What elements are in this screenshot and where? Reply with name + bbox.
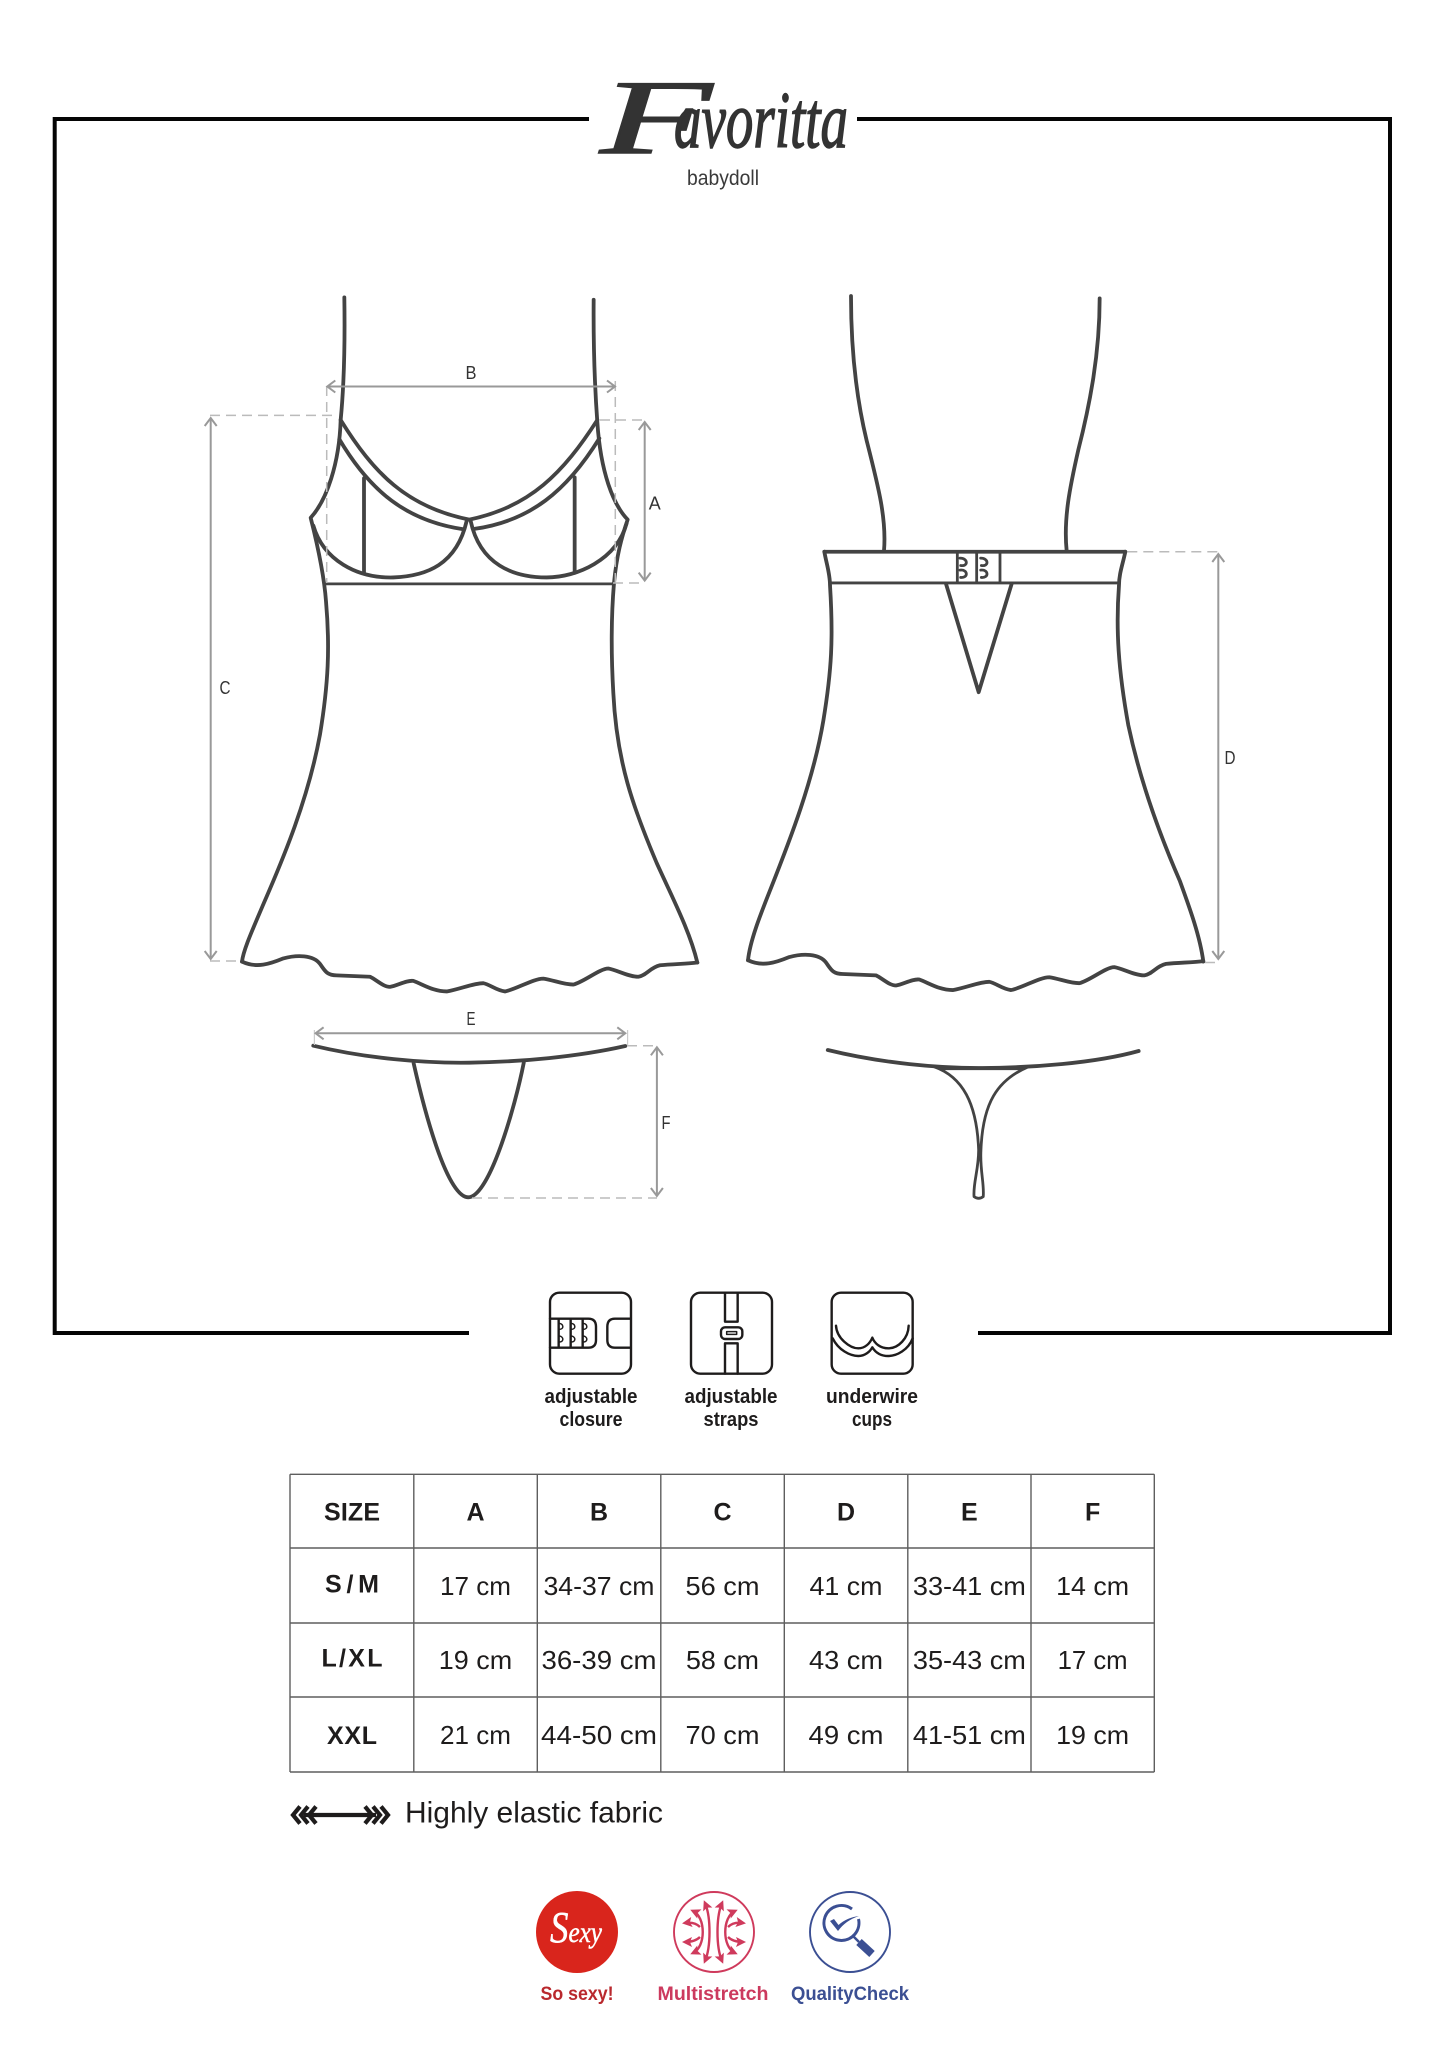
dimension C: C	[220, 678, 230, 698]
hook closure	[957, 553, 1000, 582]
table header row: E	[961, 1499, 978, 1527]
back side seams	[748, 552, 1203, 962]
row L/XL: L/XL	[322, 1645, 382, 1673]
cup underwires	[313, 521, 627, 577]
stretch circle	[674, 1892, 754, 1972]
title: Favoritta logo	[598, 59, 848, 176]
upper cup band	[341, 420, 597, 520]
back straps	[851, 296, 1100, 551]
dimension A: A	[649, 494, 661, 514]
back band	[824, 550, 1125, 554]
badge: Multistretch	[658, 1892, 768, 2005]
left strap and side seam	[242, 297, 345, 962]
back thong waistband	[828, 1050, 1139, 1068]
table header row: C	[713, 1499, 732, 1527]
label: adjustable closure: adjustable	[544, 1386, 638, 1408]
table header row: SIZE	[324, 1499, 380, 1527]
dimension F: F	[662, 1113, 670, 1133]
row S/M	[325, 1571, 1129, 1601]
front babydoll drawing	[242, 297, 697, 991]
row S/M: 17 cm	[440, 1571, 511, 1601]
dimension E: E	[466, 1009, 476, 1029]
back V insert	[946, 584, 1012, 692]
icon: magnifier with check	[824, 1905, 872, 1954]
row L/XL: 19 cm	[439, 1645, 512, 1675]
row XXL: 70 cm	[686, 1720, 760, 1750]
dimension A	[600, 420, 661, 583]
feature: underwire cups	[826, 1293, 918, 1431]
icon: double arrow	[293, 1806, 388, 1824]
table header row	[324, 1499, 1100, 1527]
So sexy label: So sexy!	[540, 1984, 614, 2005]
front thong waistband	[313, 1046, 625, 1063]
row XXL: XXL	[327, 1722, 377, 1750]
row XXL: 44-50 cm	[541, 1720, 657, 1750]
dimension E	[314, 1009, 628, 1045]
front thong panel	[414, 1063, 524, 1197]
dimension D	[1127, 552, 1236, 962]
title: Favoritta logo: F	[598, 59, 714, 176]
table header row: D	[837, 1499, 855, 1527]
row XXL: 21 cm	[440, 1720, 511, 1750]
row XXL: 41-51 cm	[913, 1720, 1026, 1750]
icon: closure	[550, 1293, 631, 1374]
row S/M: S/M	[325, 1571, 379, 1599]
cup bones	[364, 477, 575, 574]
right strap and side seam	[594, 300, 697, 963]
row XXL: 49 cm	[808, 1720, 884, 1750]
front hem	[242, 956, 697, 991]
dimension C	[210, 415, 337, 961]
table grid	[290, 1474, 1154, 1772]
back thong string	[934, 1067, 1029, 1198]
feature: adjustable closure	[544, 1293, 638, 1431]
subtitle: babydoll	[687, 167, 759, 190]
row L/XL: 17 cm	[1058, 1645, 1128, 1675]
label: underwire cups: underwire	[826, 1386, 918, 1408]
measurement lines	[210, 363, 1236, 1198]
title: Favoritta logo: avoritta	[674, 77, 848, 165]
elastic note text: Highly elastic fabric	[405, 1797, 663, 1830]
dimension D: D	[1224, 748, 1236, 768]
row L/XL: 36-39 cm	[542, 1645, 656, 1675]
quality circle	[810, 1892, 890, 1972]
row S/M: 33-41 cm	[913, 1571, 1026, 1601]
dimension F	[472, 1046, 670, 1198]
back babydoll drawing	[748, 296, 1203, 990]
row L/XL: 43 cm	[809, 1645, 883, 1675]
badge: QualityCheck	[791, 1892, 909, 2005]
Multistretch label: Multistretch	[658, 1984, 768, 2005]
band lower line	[830, 582, 1119, 584]
table header row: F	[1085, 1499, 1100, 1527]
row XXL: 19 cm	[1056, 1720, 1129, 1750]
row L/XL: 58 cm	[686, 1645, 759, 1675]
size table	[290, 1474, 1154, 1772]
elastic fabric note	[293, 1797, 663, 1830]
icon: cups	[832, 1293, 913, 1374]
row L/XL: 35-43 cm	[913, 1645, 1026, 1675]
label: adjustable closure: closure	[560, 1409, 622, 1431]
red circle	[536, 1891, 618, 1973]
front thong drawing	[313, 1046, 625, 1197]
row S/M: 41 cm	[810, 1571, 882, 1601]
row L/XL	[322, 1645, 1128, 1675]
row S/M: 14 cm	[1056, 1571, 1129, 1601]
table header row: B	[590, 1499, 608, 1527]
badge: So sexy	[536, 1891, 618, 2005]
Sexy script: Sexy	[550, 1903, 603, 1952]
feature: adjustable straps	[684, 1293, 778, 1431]
lower cup band	[339, 438, 599, 529]
label: underwire cups: cups	[852, 1409, 892, 1431]
QualityCheck label: QualityCheck	[791, 1984, 909, 2005]
label: adjustable straps: adjustable	[684, 1386, 778, 1408]
row S/M: 56 cm	[686, 1571, 760, 1601]
back hem	[748, 955, 1203, 990]
table header row: A	[466, 1499, 485, 1527]
dimension B	[327, 363, 615, 583]
frame	[55, 119, 1390, 1333]
back thong drawing	[828, 1050, 1139, 1198]
row XXL	[327, 1720, 1129, 1750]
icon: stretch arrows	[685, 1903, 743, 1961]
dimension B: B	[466, 363, 476, 383]
underbust line	[326, 582, 613, 585]
row S/M: 34-37 cm	[544, 1571, 654, 1601]
label: adjustable straps: straps	[704, 1409, 758, 1431]
icon: strap slider	[691, 1293, 772, 1374]
